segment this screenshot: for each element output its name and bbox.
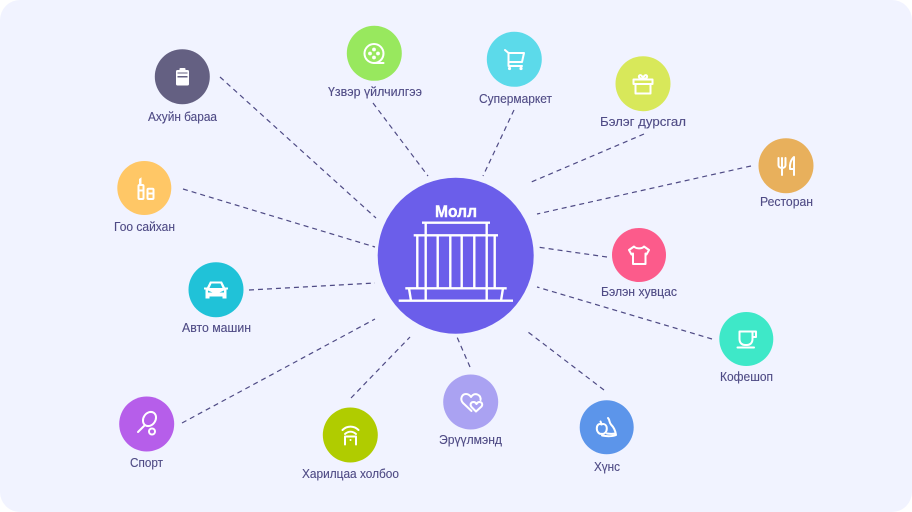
icon: fork and knife	[778, 157, 794, 175]
node: automobile	[182, 262, 251, 335]
icon: two hearts	[461, 394, 482, 412]
icon: fruit	[597, 418, 616, 436]
label: Ахуйн бараа	[148, 110, 217, 124]
label: Супермаркет	[479, 92, 552, 106]
label: Харилцаа холбоо	[302, 467, 399, 481]
icon: coffee cup	[738, 332, 756, 348]
node: food	[580, 400, 634, 474]
label: Үзвэр үйлчилгээ	[328, 85, 422, 99]
node: sport	[119, 396, 174, 470]
icon: shopping cart	[505, 50, 524, 70]
label: Эрүүлмэнд	[439, 433, 503, 447]
node: coffee shop	[719, 312, 773, 384]
label: Ресторан	[760, 195, 813, 209]
icon: racket and ball	[138, 409, 159, 434]
icon: t-shirt	[629, 246, 649, 264]
node: ready-made clothing	[601, 228, 677, 299]
label: Бэлэг дурсгал	[600, 115, 686, 129]
node: telecommunications	[302, 408, 399, 481]
icon: car	[204, 282, 228, 298]
node: entertainment	[328, 26, 422, 99]
label: Кофешоп	[720, 370, 773, 384]
icon: film reel	[364, 44, 384, 63]
label: Бэлэн хувцас	[601, 285, 677, 299]
node: gifts	[600, 56, 686, 129]
label: Хүнс	[594, 460, 620, 474]
node: supermarket	[479, 32, 552, 106]
icon: gift box	[634, 75, 652, 94]
node: health	[439, 374, 503, 447]
icon: clipboard	[176, 68, 189, 86]
node: cosmetics	[114, 161, 175, 234]
icon: wifi router	[342, 427, 358, 444]
node: household goods	[148, 49, 217, 124]
icon: mall building	[399, 223, 513, 301]
hub title: Молл	[435, 202, 477, 221]
central hub: mall	[378, 178, 534, 334]
label: Спорт	[130, 456, 163, 470]
label: Авто машин	[182, 321, 251, 335]
connector lines	[182, 77, 751, 423]
node: restaurant	[758, 138, 814, 209]
label: Гоо сайхан	[114, 220, 175, 234]
icon: lipstick and bottle	[138, 177, 154, 199]
